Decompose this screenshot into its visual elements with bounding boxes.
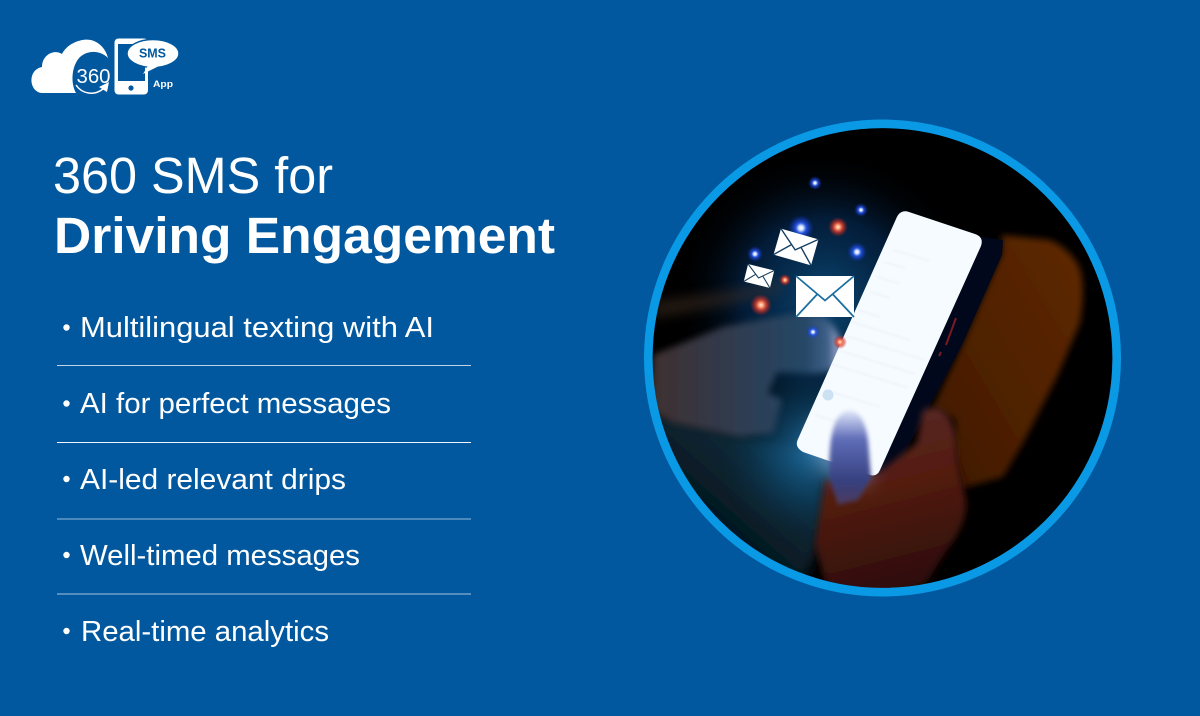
photo: lower hand	[815, 407, 966, 600]
item: Multilingual texting with AI: Multilingual texting with AI	[80, 312, 434, 344]
photo: thumb	[829, 411, 871, 505]
photo: left background arm	[652, 282, 782, 318]
photo: screen avatar	[822, 390, 834, 400]
photo: right palm	[933, 235, 1083, 488]
icon: smartphone	[114, 38, 148, 94]
item: AI for perfect messages: AI for perfect messages	[80, 388, 391, 420]
glowing dots	[747, 176, 868, 349]
title line 2: Driving Engagement	[54, 207, 555, 264]
photo: red side buttons	[939, 318, 956, 356]
icon: medium envelope	[774, 229, 818, 265]
item: Well-timed messages: Well-timed messages	[80, 540, 360, 572]
item: AI-led relevant drips: AI-led relevant drips	[80, 464, 346, 496]
icon: cloud with 360: 360	[76, 66, 110, 88]
item: Real-time analytics: Real-time analytics	[81, 616, 329, 648]
logo: 360 SMS App	[31, 38, 179, 94]
photo: phone screen	[797, 211, 982, 475]
photo: left hand and finger	[650, 314, 841, 437]
title line 1: 360 SMS for	[53, 147, 333, 204]
circular photo: hand holding glowing phone	[640, 110, 1130, 600]
icon: SMS speech bubble: SMS	[139, 46, 166, 60]
icon: cloud with 360	[31, 40, 110, 93]
photo: glow under phone	[738, 379, 832, 524]
photo: sleeve	[660, 414, 822, 576]
feature list	[57, 312, 471, 648]
icon: SMS speech bubble	[127, 40, 179, 74]
photo: blurred message text on screen	[815, 250, 930, 426]
logo label: App: App	[153, 79, 173, 90]
icon: small envelope	[744, 264, 774, 288]
photo: phone body	[884, 237, 1003, 463]
title	[53, 147, 555, 264]
icon: large envelope	[796, 276, 854, 317]
photo: phone screen glow	[806, 454, 883, 494]
ring	[648, 124, 1117, 592]
